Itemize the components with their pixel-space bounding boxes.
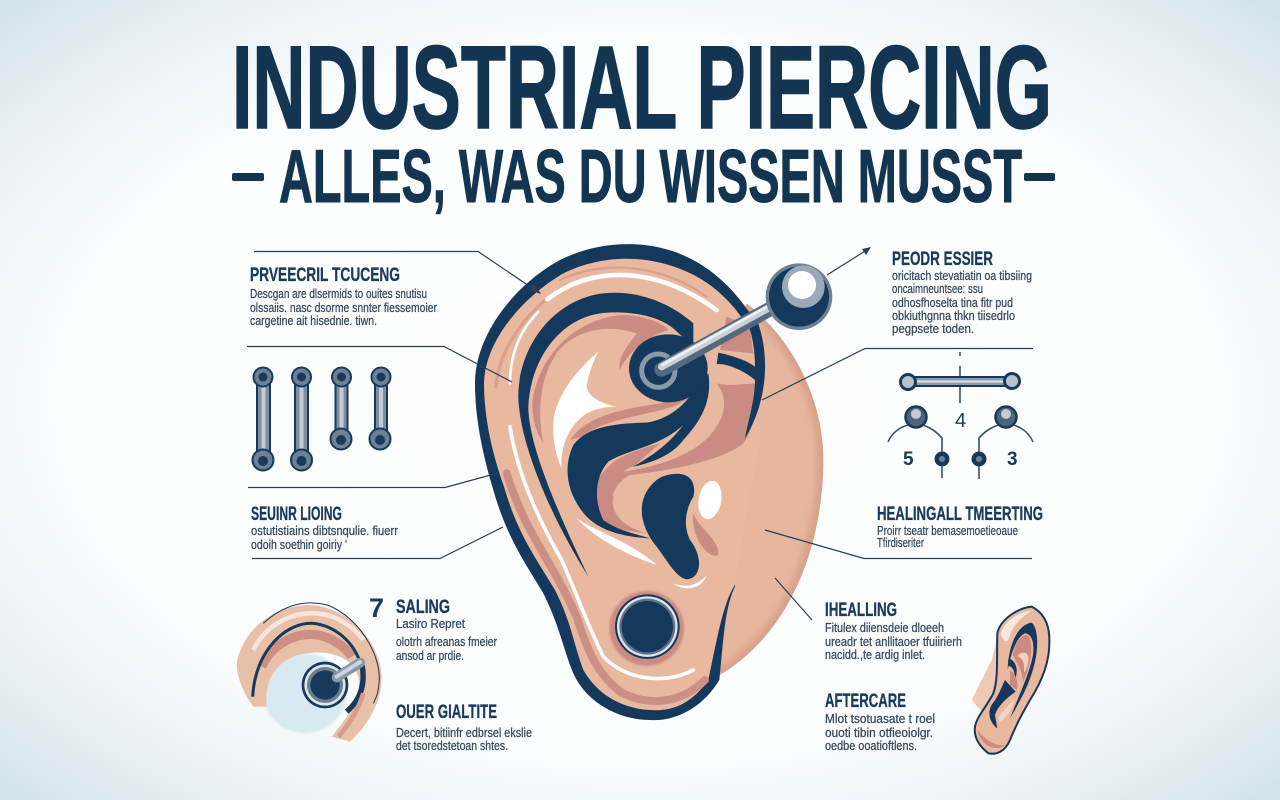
panel: ouer gialtite text: det tsoredstetoan shtes.	[396, 739, 508, 753]
barbell	[642, 263, 832, 387]
number 7: 7	[369, 593, 384, 623]
barbell 2	[291, 368, 312, 470]
panel: healing text: nacidd.,te ardig inlet.	[825, 648, 925, 662]
ear: antihelix strokes	[717, 312, 765, 438]
ear: canal	[642, 474, 699, 579]
panel: aftercare text: AFTERCARE	[825, 691, 906, 712]
icon: small ear	[972, 607, 1049, 754]
panel: healing text	[825, 600, 962, 662]
ear: skin body	[484, 259, 762, 710]
panel: middle left text: odoih soethin goiriy '	[251, 538, 347, 552]
panel: top left text: cargetine ait hisednie. tiwn.	[250, 314, 377, 328]
panel: ouer gialtite text: OUER GIALTITE	[396, 702, 497, 723]
panel: top left text: olssaiis. nasc dsorme snnter fiessemoier	[250, 301, 437, 315]
panel: healing text: ureadr tet anllitaoer tfuiirierh	[825, 635, 962, 649]
panel: top right text: PEODR ESSIER	[892, 249, 993, 270]
callout lines	[247, 247, 1033, 620]
panel: top right text	[892, 249, 1032, 336]
ear: cheek backing	[720, 304, 824, 675]
diagram: barbell sizes: 3	[1007, 449, 1018, 470]
panel: healing treatment text: HEALINGALL TMEERTING	[877, 504, 1043, 525]
barbell 4	[370, 368, 390, 450]
diagram: barbell sizes	[888, 352, 1033, 479]
panel: saling text	[396, 597, 497, 663]
panel: top right text: pegpsete toden.	[892, 322, 974, 336]
inset: piercing close-up	[237, 603, 382, 742]
panel: aftercare text	[825, 691, 935, 753]
ear: white highlights	[553, 352, 725, 588]
panel: healing treatment text: Proirr tseatr bemasemoetieoaue	[877, 524, 1018, 538]
ear: navy outline	[475, 244, 753, 720]
panel: middle left text: SEUINR LIOING	[251, 504, 342, 525]
ear: navy S-curve around piercing	[568, 373, 709, 538]
ear: rim shading and highlights	[496, 268, 717, 701]
panel: aftercare text: oedbe ooatioftlens.	[825, 739, 917, 753]
ear: piercing hole	[629, 334, 708, 402]
panel: ouer gialtite text: Decert, bitiinfr edbrsel ekslie	[396, 726, 532, 740]
panel: healing text: Fitulex diiensdeie dloeeh	[825, 621, 944, 635]
ear: navy inner helix	[518, 293, 693, 577]
panel: top right text: oricitach stevatiatin oa tibsiing	[892, 269, 1032, 283]
panel: top left text	[250, 265, 437, 328]
panel: ouer gialtite text	[396, 702, 532, 753]
diagram: barbell sizes: 4	[955, 410, 966, 432]
panel: saling text: SALING	[396, 597, 450, 618]
icon: four barbells	[252, 368, 390, 470]
diagram: barbell sizes: 5	[903, 449, 914, 470]
panel: saling text: ansod ar prdie.	[396, 649, 464, 663]
panel: healing text: IHEALLING	[825, 600, 897, 621]
panel: top left text: PRVEECRIL TCUCENG	[250, 265, 400, 286]
panel: middle left text: ostutistiains dibtsnqulie. fiuerr	[251, 524, 398, 538]
ear: rose concha shading	[532, 315, 756, 556]
panel: top right text: oncaimneuntsee: ssu	[892, 282, 983, 296]
panel: aftercare text: Mlot tsotuasate t roel	[825, 712, 935, 726]
main ear illustration	[475, 244, 832, 720]
panel: saling text: Lasiro Repret	[396, 617, 465, 631]
panel: healing treatment text: Tfirdiseriter	[877, 536, 924, 550]
panel: aftercare text: ouoti tibin otfieoiolgr.	[825, 726, 933, 740]
barbell 1	[252, 368, 274, 470]
barbell 3	[330, 368, 352, 450]
panel: top right text: odhosfhoselta tina fitr pud	[892, 296, 1013, 310]
panel: healing treatment text	[877, 504, 1043, 550]
panel: top left text: Descgan are dlsermids to ouites snutisu	[250, 287, 427, 301]
panel: top right text: obkiuthgnna thkn tiisedrlo	[892, 309, 1015, 323]
panel: middle left text	[251, 504, 398, 552]
panel: saling text: olotrh afreanas fmeier	[396, 635, 497, 649]
ear: lobe tunnel	[609, 591, 684, 666]
